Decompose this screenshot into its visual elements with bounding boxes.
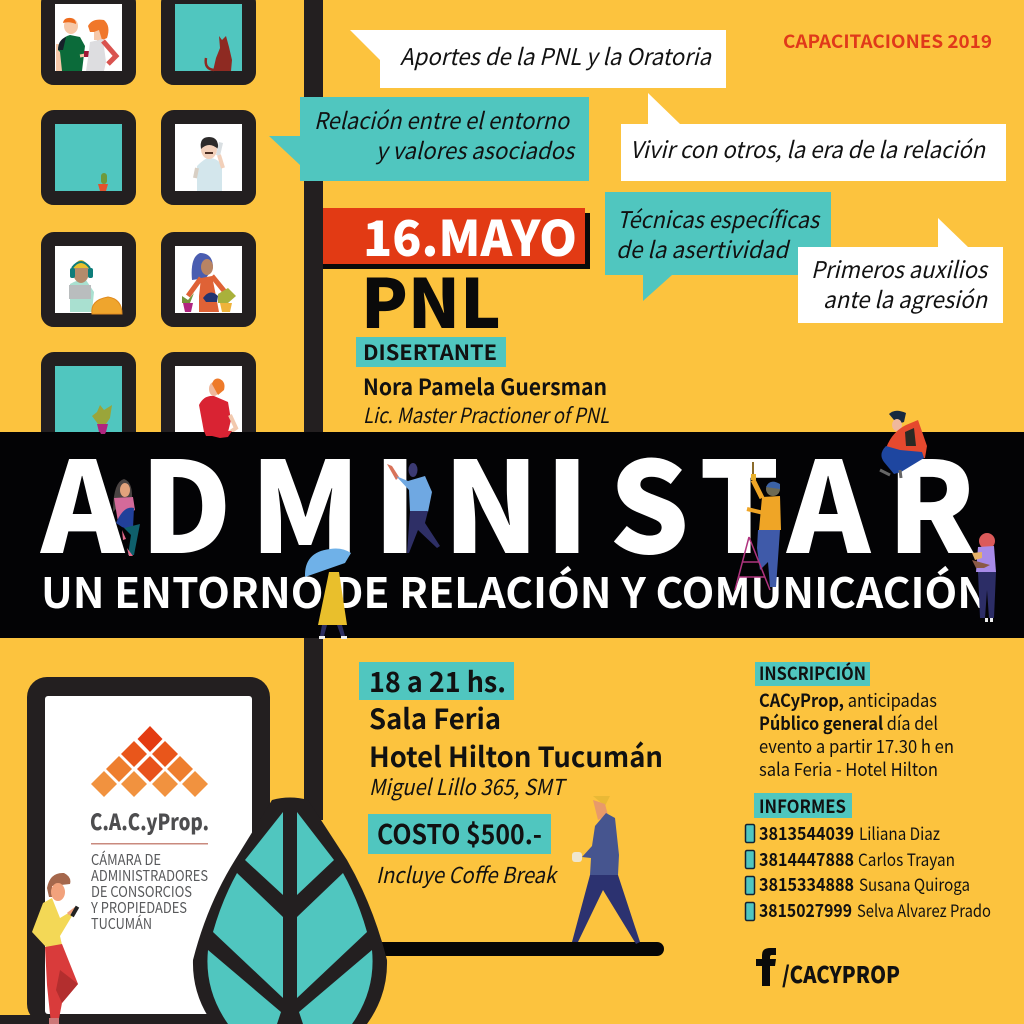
callout: Relación entre el entorno: Relación entre el entorno bbox=[314, 102, 571, 136]
logo diamonds bbox=[91, 726, 208, 797]
callout: Relación entre el entorno: y valores asociados bbox=[375, 132, 576, 166]
contacts list: Carlos Trayan bbox=[858, 846, 955, 871]
callout: Vivir con otros: Vivir con otros, la era de la relación bbox=[630, 131, 986, 165]
callout: Aportes de la PNL: Aportes de la PNL y la Oratoria bbox=[400, 38, 712, 72]
figure: walking businessman bbox=[572, 796, 640, 944]
organisation name: TUCUMÁN bbox=[91, 913, 152, 934]
venue: Sala Feria bbox=[369, 698, 501, 738]
contacts list: 3815334888 bbox=[759, 871, 854, 897]
venue: Hotel Hilton Tucumán bbox=[369, 736, 663, 776]
title: ADMINISTAR: ADMINISTAR bbox=[39, 408, 976, 590]
window: person with headphones and cat bbox=[48, 239, 129, 320]
label: capacitaciones 2019: CAPACITACIONES 2019 bbox=[783, 28, 992, 54]
window: cactus bbox=[48, 117, 129, 198]
callout: Aportes de la PNL bbox=[350, 30, 726, 88]
callout: Técnicas específicas bbox=[605, 192, 831, 301]
contacts list: Selva Alvarez Prado bbox=[857, 897, 991, 922]
registration details: CACyProp, anticipadas bbox=[759, 687, 937, 713]
registration details: sala Feria - Hotel Hilton bbox=[759, 756, 938, 782]
speaker: Nora Pamela Guersman bbox=[363, 370, 607, 402]
organisation name: DE CONSORCIOS bbox=[91, 881, 192, 902]
figure: woman carrying box bbox=[972, 533, 996, 622]
speaker: Lic. Master Practioner of PNL bbox=[363, 400, 610, 430]
facebook link: /CACYPROP bbox=[782, 956, 900, 990]
callout: Primeros auxilios: Primeros auxilios bbox=[811, 251, 989, 285]
callout: Vivir con otros bbox=[621, 93, 1006, 181]
logo wordmark: C.A.C.yProp. bbox=[90, 805, 209, 837]
contacts list: Susana Quiroga bbox=[859, 871, 970, 896]
contacts list: Liliana Diaz bbox=[859, 820, 940, 845]
contacts list: 3813544039 bbox=[759, 820, 854, 846]
figure: sitting woman with phone bbox=[113, 479, 140, 556]
note: coffee break: Incluye Coffe Break bbox=[376, 858, 559, 890]
contacts list: 3815027999 bbox=[759, 897, 852, 923]
window: potted plant bbox=[48, 359, 129, 449]
subtitle: UN ENTORNO DE RELACIÓN Y COMUNICACIÓN bbox=[41, 560, 989, 621]
window: woman watering plants bbox=[168, 239, 249, 320]
venue bbox=[369, 698, 663, 802]
figure: man reaching up bbox=[387, 463, 440, 553]
figure: man on ladder bbox=[735, 462, 781, 590]
tag: inscripcion: INSCRIPCIÓN bbox=[759, 660, 866, 686]
tag: informes: INFORMES bbox=[759, 793, 846, 819]
registration details: Público general día del bbox=[759, 710, 938, 736]
date banner: 16.MAYO: 16.MAYO bbox=[363, 200, 577, 271]
organisation name: Y PROPIEDADES bbox=[90, 897, 187, 918]
callout: Primeros auxilios: ante la agresión bbox=[823, 281, 988, 315]
black title band bbox=[0, 432, 1024, 638]
contacts list bbox=[746, 820, 991, 923]
organisation name bbox=[90, 849, 208, 934]
leaf bbox=[193, 798, 387, 1024]
figure: man in yellow shirt with phone bbox=[32, 873, 79, 1024]
window: man on phone bbox=[168, 117, 249, 198]
contacts list: 3814447888 bbox=[759, 846, 854, 872]
figure: man sitting with phone bbox=[880, 411, 927, 478]
tag: disertante: DISERTANTE bbox=[363, 337, 497, 367]
heading: PNL: PNL bbox=[361, 249, 501, 348]
window figures overlapping band bbox=[100, 431, 232, 438]
organisation name: CÁMARA DE bbox=[91, 849, 161, 870]
registration details: evento a partir 17.30 h en bbox=[759, 733, 954, 759]
figure: woman with umbrella bbox=[305, 548, 351, 639]
facebook link bbox=[756, 948, 900, 990]
window: man in red shirt bbox=[168, 359, 249, 449]
venue: Miguel Lillo 365, SMT bbox=[369, 770, 567, 802]
tag: cost: COSTO $500.- bbox=[377, 813, 542, 852]
callout: Primeros auxilios bbox=[798, 218, 1003, 323]
speaker bbox=[363, 370, 610, 430]
building vertical line bbox=[304, 0, 323, 820]
organisation name: ADMINISTRADORES bbox=[91, 865, 208, 886]
window: cat bbox=[168, 0, 249, 78]
floor pole bbox=[370, 942, 664, 956]
callout: Técnicas específicas: de la asertividad bbox=[616, 231, 791, 265]
tablet with logo bbox=[0, 677, 270, 1024]
window: couple talking bbox=[48, 0, 129, 78]
tag: time: 18 a 21 hs. bbox=[369, 661, 506, 701]
registration details bbox=[759, 687, 954, 782]
callout: Técnicas específicas: Técnicas específicas bbox=[617, 201, 821, 235]
callout: Relación entre el entorno bbox=[269, 97, 589, 181]
